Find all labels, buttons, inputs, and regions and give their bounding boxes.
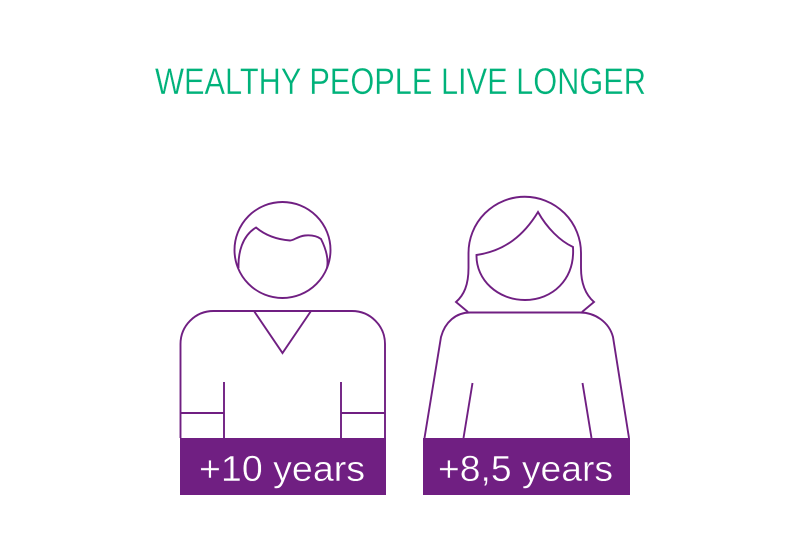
title: WEALTHY PEOPLE LIVE LONGER <box>155 60 646 102</box>
man hair line <box>238 228 328 268</box>
woman hair <box>456 197 594 312</box>
man head <box>234 202 330 298</box>
woman torso <box>424 312 629 438</box>
man torso <box>180 311 385 438</box>
man collar <box>254 311 311 353</box>
man right arm <box>341 382 385 438</box>
label: man: +10 years <box>199 448 365 489</box>
label: man <box>180 438 386 495</box>
label: woman: +8,5 years <box>438 448 613 489</box>
label: woman <box>423 438 630 495</box>
man left arm <box>180 382 224 438</box>
icon: woman figure <box>424 197 629 438</box>
icon: man figure <box>180 202 385 438</box>
woman face <box>476 212 573 300</box>
woman right arm <box>582 383 592 438</box>
woman left arm <box>464 383 472 438</box>
